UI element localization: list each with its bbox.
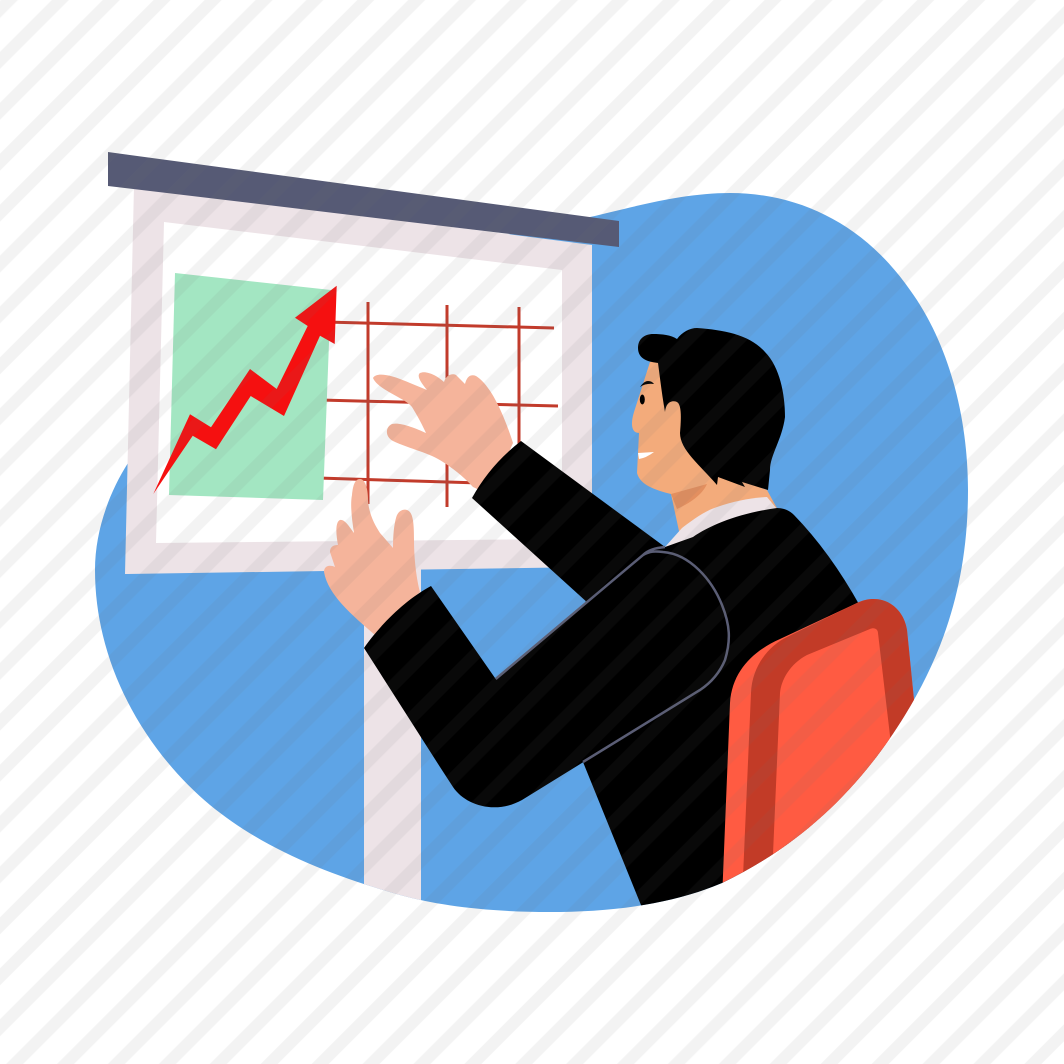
eyebrow xyxy=(640,381,654,387)
green chart area xyxy=(169,273,331,500)
lower hand xyxy=(324,479,420,635)
chair inner panel xyxy=(773,628,890,854)
red chair xyxy=(722,599,914,883)
person body and back arm xyxy=(472,441,860,915)
front arm xyxy=(364,551,729,807)
top rail xyxy=(108,152,619,247)
eye xyxy=(640,394,645,404)
board stand xyxy=(364,560,421,920)
hair xyxy=(638,328,785,490)
red growth arrow xyxy=(153,286,337,494)
chart grid xyxy=(318,302,558,507)
arm outline xyxy=(496,547,729,762)
ear xyxy=(665,401,681,433)
presentation board xyxy=(108,152,619,920)
smile xyxy=(638,452,654,459)
shirt collar xyxy=(665,497,777,547)
chair outer xyxy=(722,599,914,883)
neck shadow xyxy=(671,484,707,509)
board frame xyxy=(125,186,592,574)
upper hand xyxy=(373,372,513,495)
background blob xyxy=(95,193,968,912)
face skin xyxy=(632,360,778,545)
blue gap under frame xyxy=(422,568,600,640)
neck and face xyxy=(632,328,785,545)
chair dark band xyxy=(743,599,914,872)
board screen xyxy=(156,222,562,543)
